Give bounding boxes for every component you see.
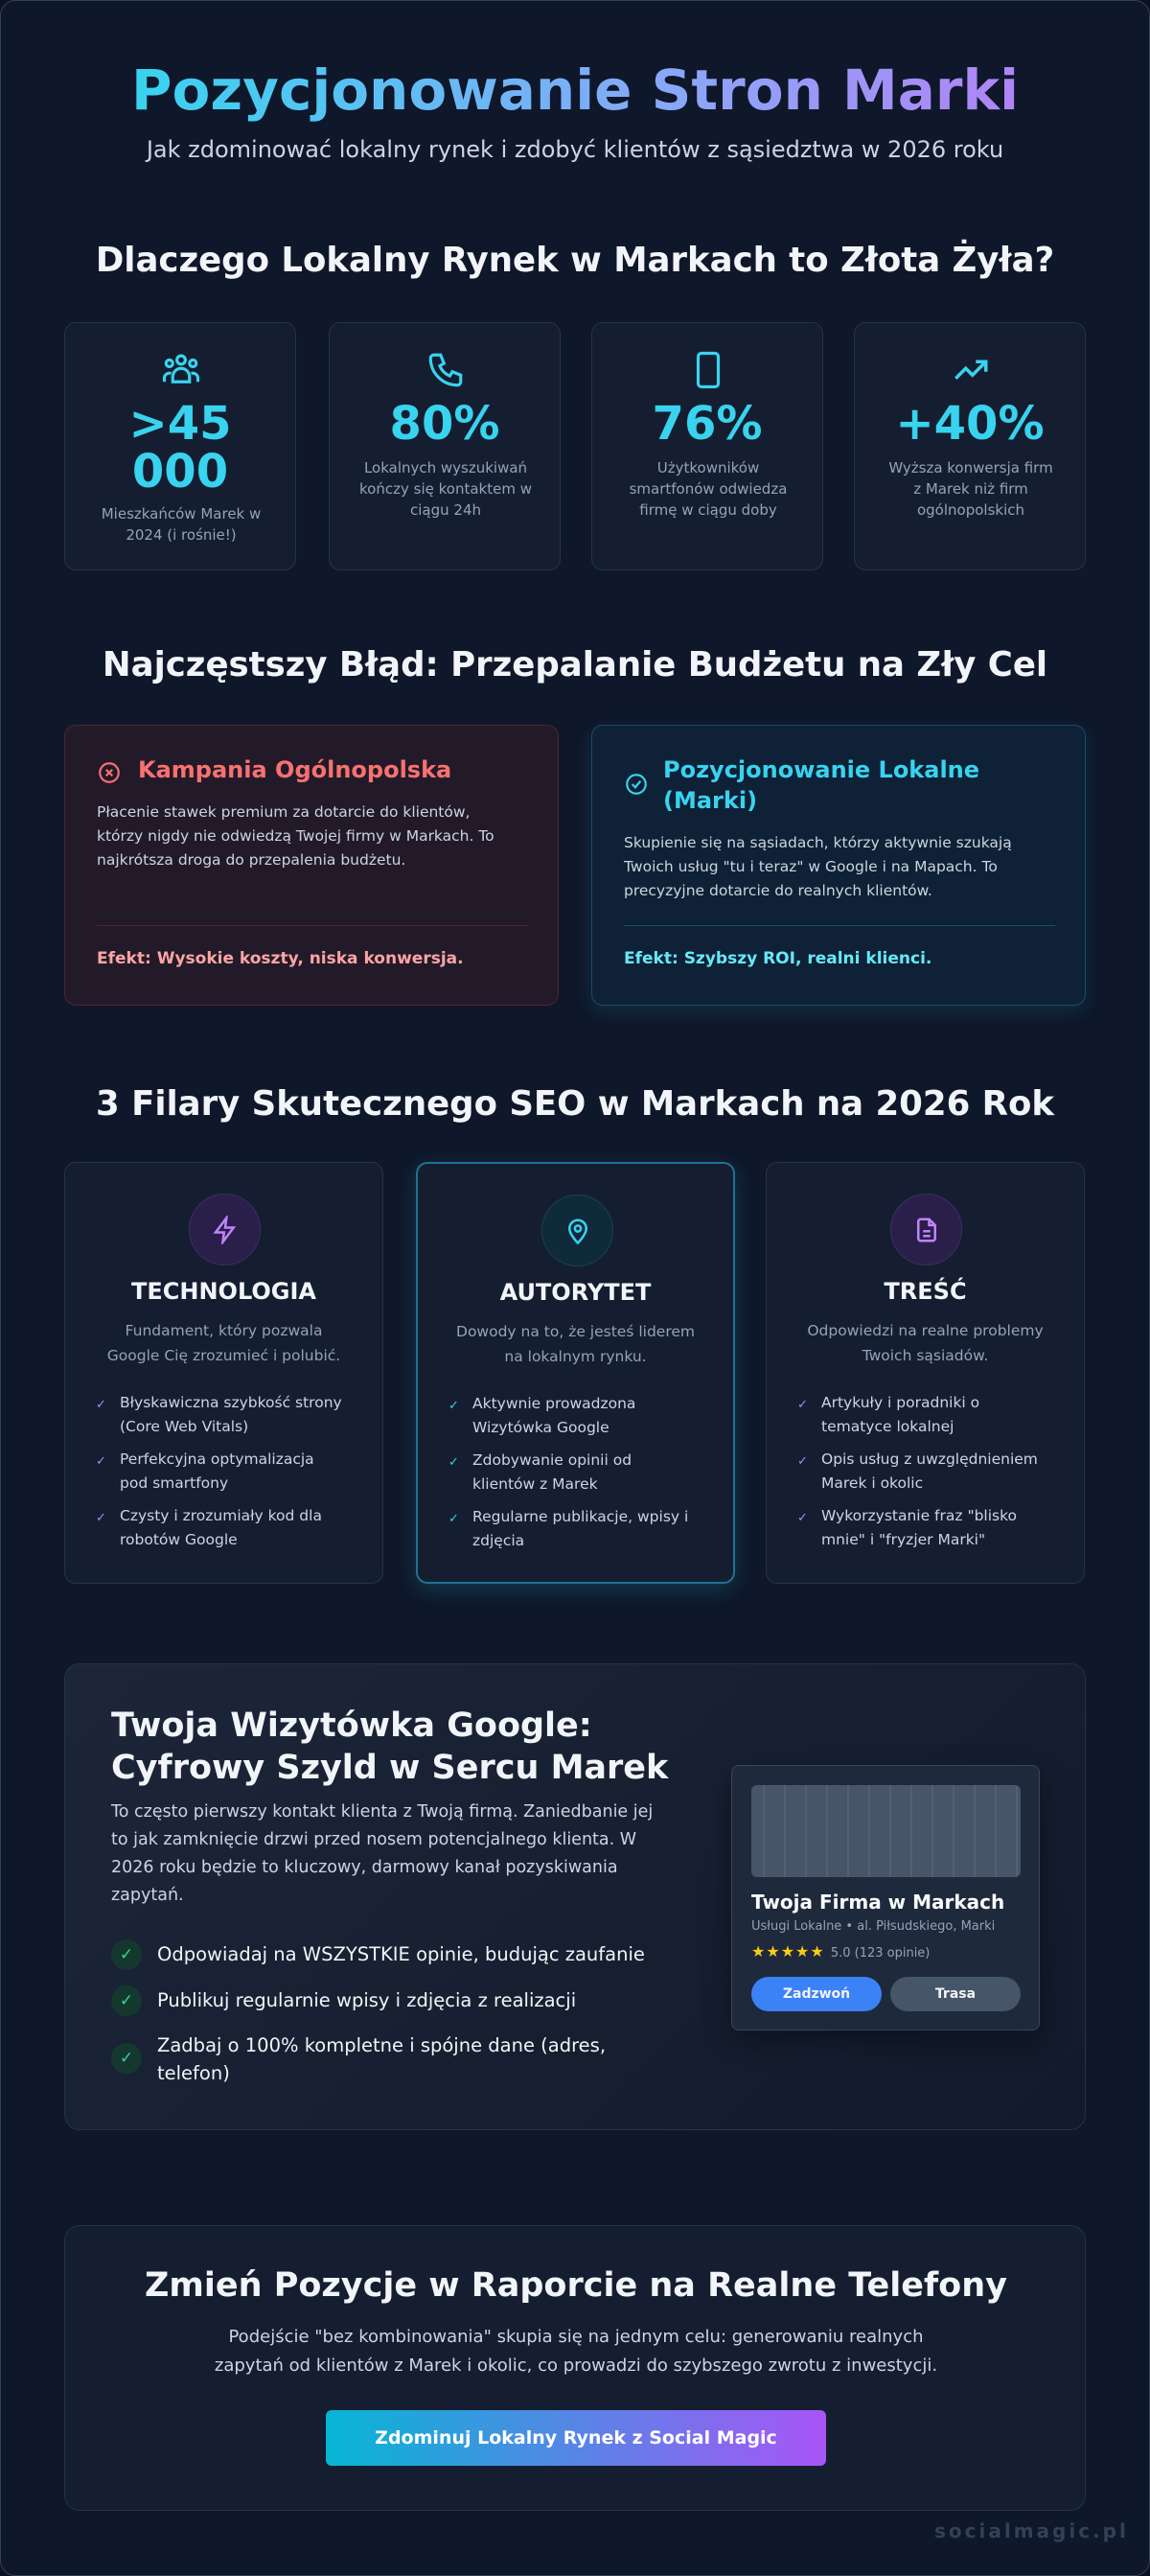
panel: national campaign: którzy nigdy nie odwiedzą Twojej firmy w Markach. To najkrótsza droga do przepalenia budżetu. <box>97 827 494 869</box>
stat card: searches: 80% <box>390 397 499 451</box>
pillar: technology: Fundament, który pozwala Google Cię zrozumieć i polubić. <box>107 1322 340 1364</box>
map image placeholder <box>751 1785 1021 1877</box>
panel: local SEO: Efekt: Szybszy ROI, realni klienci. <box>624 949 932 968</box>
stat card: conversion: Wyższa konwersja firm <box>888 459 1053 476</box>
pillar: technology: Perfekcyjna optymalizacja <box>120 1450 314 1468</box>
CTA heading: Zmień Pozycje w Raporcie na Realne Telefony <box>145 2266 1007 2305</box>
panel: national campaign <box>64 725 559 1006</box>
rating stars: ★★★★★ 5.0 (123 opinie) <box>751 1942 930 1961</box>
heading: pillars: 3 Filary Skutecznego SEO w Markach na 2026 Rok <box>96 1084 1054 1124</box>
text block: 2026 roku będzie to kluczowy, darmowy kanał pozyskiwania <box>111 1858 618 1877</box>
pillar: content: Wykorzystanie fraz "blisko <box>821 1507 1017 1524</box>
CTA text: Podejście "bez kombinowania" skupia się na jednym celu: generowaniu realnych <box>228 2327 924 2347</box>
pillar: technology: ✓ <box>96 1511 106 1525</box>
stat card: residents: Mieszkańców Marek w 2024 (i rośnie!) <box>102 505 261 544</box>
pillar: content: mnie" i "fryzjer Marki" <box>821 1531 985 1548</box>
stat card: smartphones: smartfonów odwiedza firmę w ciągu doby <box>630 480 787 519</box>
icon: document <box>890 1194 962 1265</box>
heading: why local: Dlaczego Lokalny Rynek w Markach to Złota Żyła? <box>96 241 1054 280</box>
business card mockup: Twoja Firma w Markach <box>751 1891 1004 1914</box>
stat card: conversion: +40% <box>895 397 1045 451</box>
heading: google profile <box>111 1706 669 1787</box>
heading: mistake: Najczęstszy Błąd: Przepalanie Budżetu na Zły Cel <box>103 645 1047 685</box>
panel: google business profile <box>64 1663 1086 2130</box>
checklist: ✓ <box>120 1945 133 1964</box>
pillar: content: tematyce lokalnej <box>821 1418 954 1435</box>
text block: To często pierwszy kontakt klienta z Twoją firmą. Zaniedbanie jej <box>111 1802 653 1822</box>
pillar: technology: ✓ <box>96 1454 106 1469</box>
pillar: technology <box>64 1162 383 1584</box>
stat card: searches: Lokalnych wyszukiwań kończy się kontaktem w ciągu 24h <box>359 459 532 519</box>
pillar: authority: Dowody na to, że jesteś liderem na lokalnym rynku. <box>456 1323 695 1365</box>
checklist: ✓ <box>120 1991 133 2010</box>
footer brand: socialmagic.pl <box>934 2519 1129 2542</box>
pillar: authority <box>416 1162 735 1584</box>
icon: people <box>163 355 199 383</box>
text block: zapytań. <box>111 1886 184 1905</box>
checklist: Publikuj regularnie wpisy i zdjęcia z realizacji <box>157 1989 576 2011</box>
title: Pozycjonowanie Stron Marki <box>131 58 1019 123</box>
stat card: residents: 000 <box>132 445 228 499</box>
icon: phone <box>429 353 462 387</box>
CTA text <box>215 2327 937 2376</box>
pillar: content <box>766 1162 1085 1584</box>
pillar: authority: ✓ <box>448 1455 459 1470</box>
pillar: content: TREŚĆ <box>884 1278 967 1305</box>
pillar: content: Odpowiedzi na realne problemy Twoich sąsiadów. <box>807 1322 1044 1364</box>
pillar: technology: pod smartfony <box>120 1474 228 1492</box>
panel: national campaign: Efekt: Wysokie koszty, niska konwersja. <box>97 949 464 968</box>
pillar: content: Opis usług z uwzględnieniem Marek i okolic <box>821 1450 1038 1492</box>
stat card: residents <box>64 322 296 570</box>
pillar: authority: klientów z Marek <box>472 1475 598 1493</box>
subtitle: Jak zdominować lokalny rynek i zdobyć klientów z sąsiedztwa w 2026 roku <box>147 136 1003 163</box>
button: route: Trasa <box>935 1986 976 2002</box>
CTA button <box>326 2410 826 2466</box>
stat card: smartphones: 76% <box>653 397 762 451</box>
pillar: authority: Wizytówka Google <box>472 1419 610 1436</box>
pillar: technology: TECHNOLOGIA <box>131 1278 316 1305</box>
CTA button: Zdominuj Lokalny Rynek z Social Magic <box>375 2427 777 2448</box>
icon: x circle <box>99 762 120 783</box>
pillar: content: ✓ <box>797 1511 808 1525</box>
pillar: technology: Czysty i zrozumiały kod dla robotów Google <box>120 1507 322 1548</box>
pillar: content: Artykuły i poradniki o <box>821 1394 979 1411</box>
business card mockup <box>731 1765 1040 2031</box>
stat card: conversion <box>854 322 1086 570</box>
pillar: authority: ✓ <box>448 1399 459 1413</box>
stat card: searches <box>329 322 561 570</box>
heading: google profile: Twoja Wizytówka Google: <box>111 1706 592 1745</box>
checklist: Odpowiadaj na WSZYSTKIE opinie, budując zaufanie <box>157 1943 645 1965</box>
checklist <box>111 1939 645 2084</box>
panel: local SEO: Twoich usług "tu i teraz" w Google i na Mapach. To precyzyjne dotarcie do realnych klientów. <box>624 858 998 899</box>
panel: local SEO: Skupienie się na sąsiadach, którzy aktywnie szukają <box>624 834 1012 851</box>
stat card: conversion: z Marek niż firm ogólnopolskich <box>913 480 1028 519</box>
pillar: technology: Błyskawiczna szybkość strony (Core Web Vitals) <box>120 1394 342 1435</box>
checklist: Zadbaj o 100% kompletne i spójne dane (adres, telefon) <box>157 2034 606 2084</box>
panel: local SEO: Pozycjonowanie Lokalne <box>663 756 979 783</box>
icon: lightning <box>189 1194 261 1265</box>
pillar: authority: Aktywnie prowadzona <box>472 1395 635 1412</box>
button: route <box>890 1977 1021 2011</box>
pillar: content: ✓ <box>797 1398 808 1412</box>
stat card: residents: >45 <box>128 397 232 451</box>
text block <box>111 1802 653 1905</box>
business card mockup: Usługi Lokalne • al. Piłsudskiego, Marki <box>751 1919 995 1934</box>
pillar: content: ✓ <box>797 1454 808 1469</box>
icon: smartphone <box>696 351 721 389</box>
CTA text: zapytań od klientów z Marek i okolic, co prowadzi do szybszego zwrotu z inwestycji. <box>215 2356 937 2376</box>
icon: map pin <box>541 1195 613 1266</box>
stat card: smartphones: Użytkowników <box>657 459 759 476</box>
heading: google profile: Cyfrowy Szyld w Sercu Marek <box>111 1749 668 1787</box>
button: call: Zadzwoń <box>783 1986 850 2002</box>
button: call <box>751 1977 882 2011</box>
panel: local SEO: (Marki) <box>663 787 757 814</box>
pillar: technology: ✓ <box>96 1398 106 1412</box>
icon: check circle <box>626 774 647 795</box>
pillar: authority: ✓ <box>448 1512 459 1526</box>
panel: local SEO <box>591 725 1086 1006</box>
checklist: ✓ <box>120 2049 133 2068</box>
icon: trend up <box>954 360 987 380</box>
pillar: authority: Regularne publikacje, wpisy i zdjęcia <box>472 1508 688 1549</box>
CTA panel <box>64 2225 1086 2511</box>
panel: national campaign: Kampania Ogólnopolska <box>138 756 451 783</box>
panel: national campaign: Płacenie stawek premium za dotarcie do klientów, <box>97 803 470 821</box>
stat card: smartphones <box>591 322 823 570</box>
pillar: authority: AUTORYTET <box>500 1279 651 1306</box>
pillar: authority: Zdobywanie opinii od <box>472 1451 632 1469</box>
text block: to jak zamknięcie drzwi przed nosem potencjalnego klienta. W <box>111 1830 636 1849</box>
